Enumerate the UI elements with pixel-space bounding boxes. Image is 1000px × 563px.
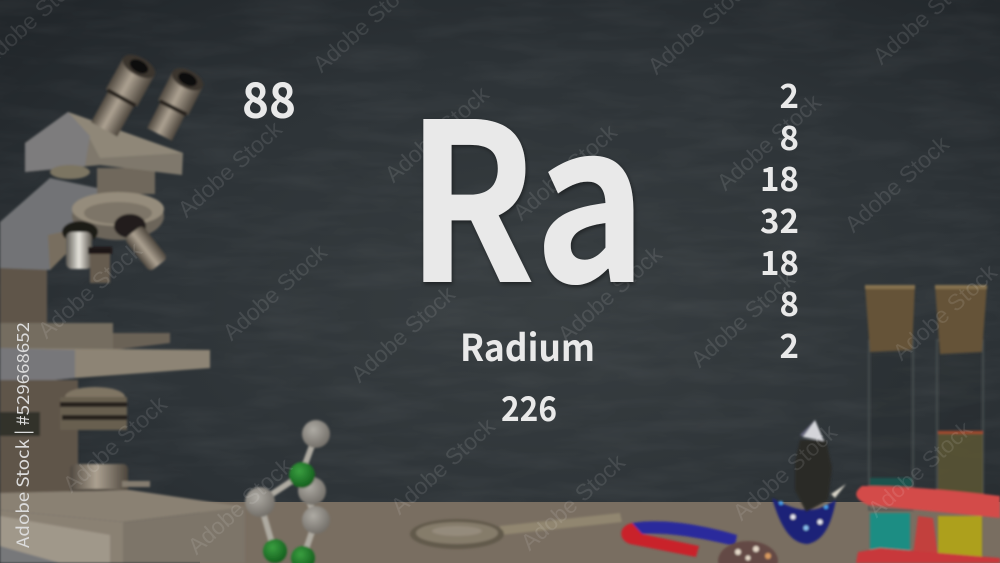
watermarks: Adobe Stock xyxy=(182,452,297,559)
donut shaped mineral xyxy=(718,541,778,563)
molecule model xyxy=(245,420,330,563)
microscope xyxy=(0,50,245,563)
watermarks: Adobe Stock xyxy=(515,448,630,555)
watermarks: Adobe Stock xyxy=(862,415,977,522)
watermarks: Adobe Stock xyxy=(379,80,494,187)
electron shell configuration: 18 xyxy=(760,153,799,201)
watermarks: Adobe Stock xyxy=(507,118,622,225)
crystal xyxy=(772,420,846,544)
watermarks: Adobe Stock xyxy=(839,130,954,237)
electron shell configuration: 32 xyxy=(760,195,799,243)
atomic number: 88 xyxy=(242,62,296,133)
atomic mass: 226 xyxy=(501,382,557,431)
watermarks: Adobe Stock xyxy=(727,418,842,525)
watermarks: Adobe Stock xyxy=(217,238,332,345)
watermarks: Adobe Stock xyxy=(887,258,1000,365)
element name: Radium xyxy=(460,318,595,372)
element symbol: Ra xyxy=(406,28,647,346)
watermarks: Adobe Stock xyxy=(711,88,826,195)
electron shell configuration: 2 xyxy=(780,70,799,118)
watermarks: Adobe Stock xyxy=(57,390,172,497)
watermarks: Adobe Stock xyxy=(345,280,460,387)
watermarks: Adobe Stock xyxy=(552,240,667,347)
electron shell configuration: 2 xyxy=(780,320,799,368)
electron shell configuration: 8 xyxy=(780,278,799,326)
electron shell configuration: 8 xyxy=(780,112,799,160)
table surface xyxy=(200,502,1000,563)
test tubes and rack xyxy=(856,285,1000,563)
electron shell configuration xyxy=(760,70,799,368)
magnifying glass xyxy=(410,513,622,549)
electron shell configuration: 18 xyxy=(760,237,799,285)
watermarks: Adobe Stock xyxy=(32,236,147,343)
watermarks: Adobe Stock xyxy=(685,265,800,372)
watermarks: Adobe Stock xyxy=(172,115,287,222)
stock id caption: Adobe Stock | #529668652 xyxy=(9,322,34,548)
watermarks: Adobe Stock xyxy=(385,412,500,519)
horseshoe magnet xyxy=(621,521,737,557)
